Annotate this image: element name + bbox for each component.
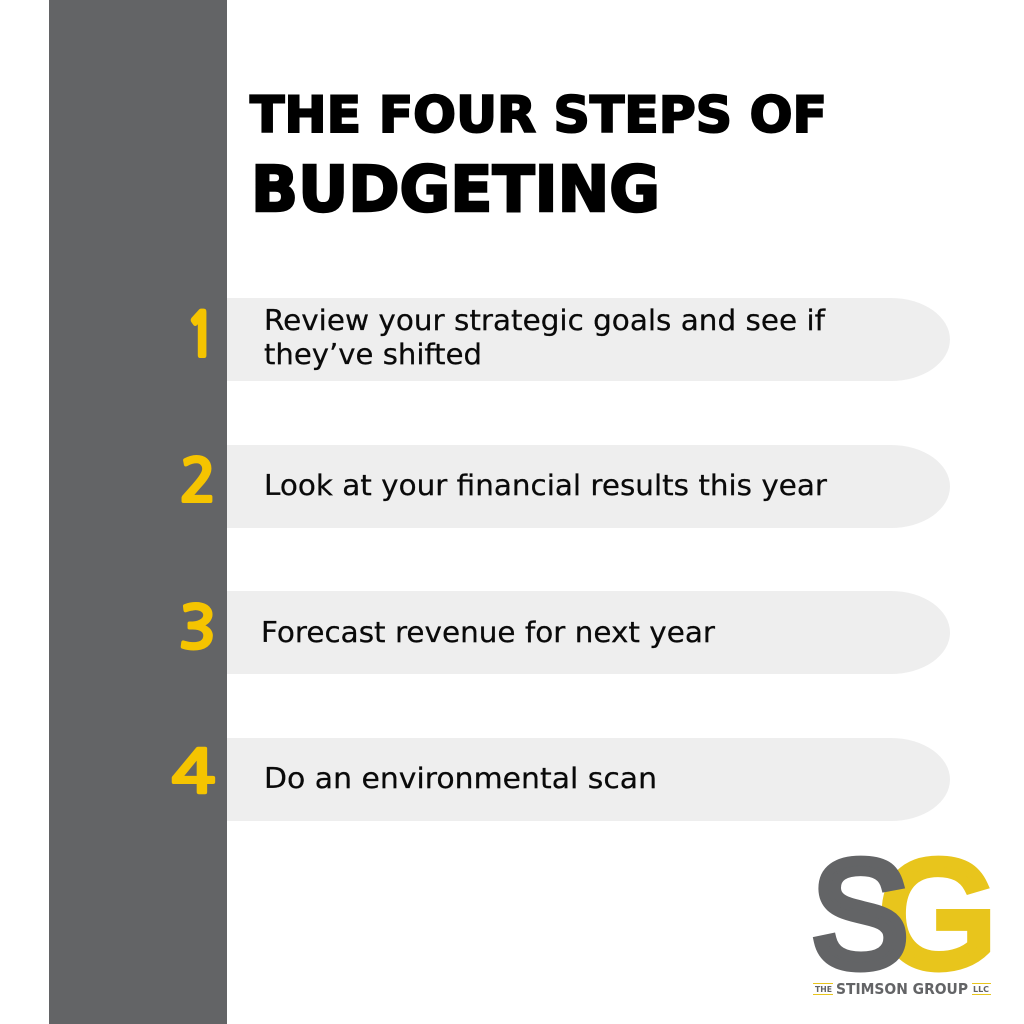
step 4 number: 4 [171,743,216,802]
step 3 text: Forecast revenue for next year [261,616,715,649]
title [250,86,827,226]
step 2 [179,445,950,528]
logo letter S: S [812,829,908,998]
step 1 text: they’ve shifted [264,338,482,371]
logo letter G: G [879,829,996,998]
step 4 pill [227,738,950,821]
step 3 number: 3 [178,599,217,658]
title: BUDGETING [251,153,660,226]
logo wordmark: LLC [973,985,990,994]
step 1 [186,298,950,381]
step 2 pill [227,445,950,528]
step 3 pill [227,591,950,674]
step 1 number: 1 [186,306,216,365]
step 2 number: 2 [179,452,217,511]
logo wordmark: STIMSON GROUP [836,980,968,998]
title: THE FOUR STEPS OF [250,86,827,144]
step 4 text: Do an environmental scan [264,762,657,795]
step 1 pill [227,298,950,381]
step 1 text: Review your strategic goals and see if [264,304,826,337]
step 3 [178,591,950,674]
logo: The Stimson Group LLC [812,829,996,998]
step 4 [171,738,950,821]
step 2 text: Look at your financial results this year [264,469,827,502]
panel: grey sidebar [49,0,227,1024]
logo wordmark: THE [815,985,832,994]
